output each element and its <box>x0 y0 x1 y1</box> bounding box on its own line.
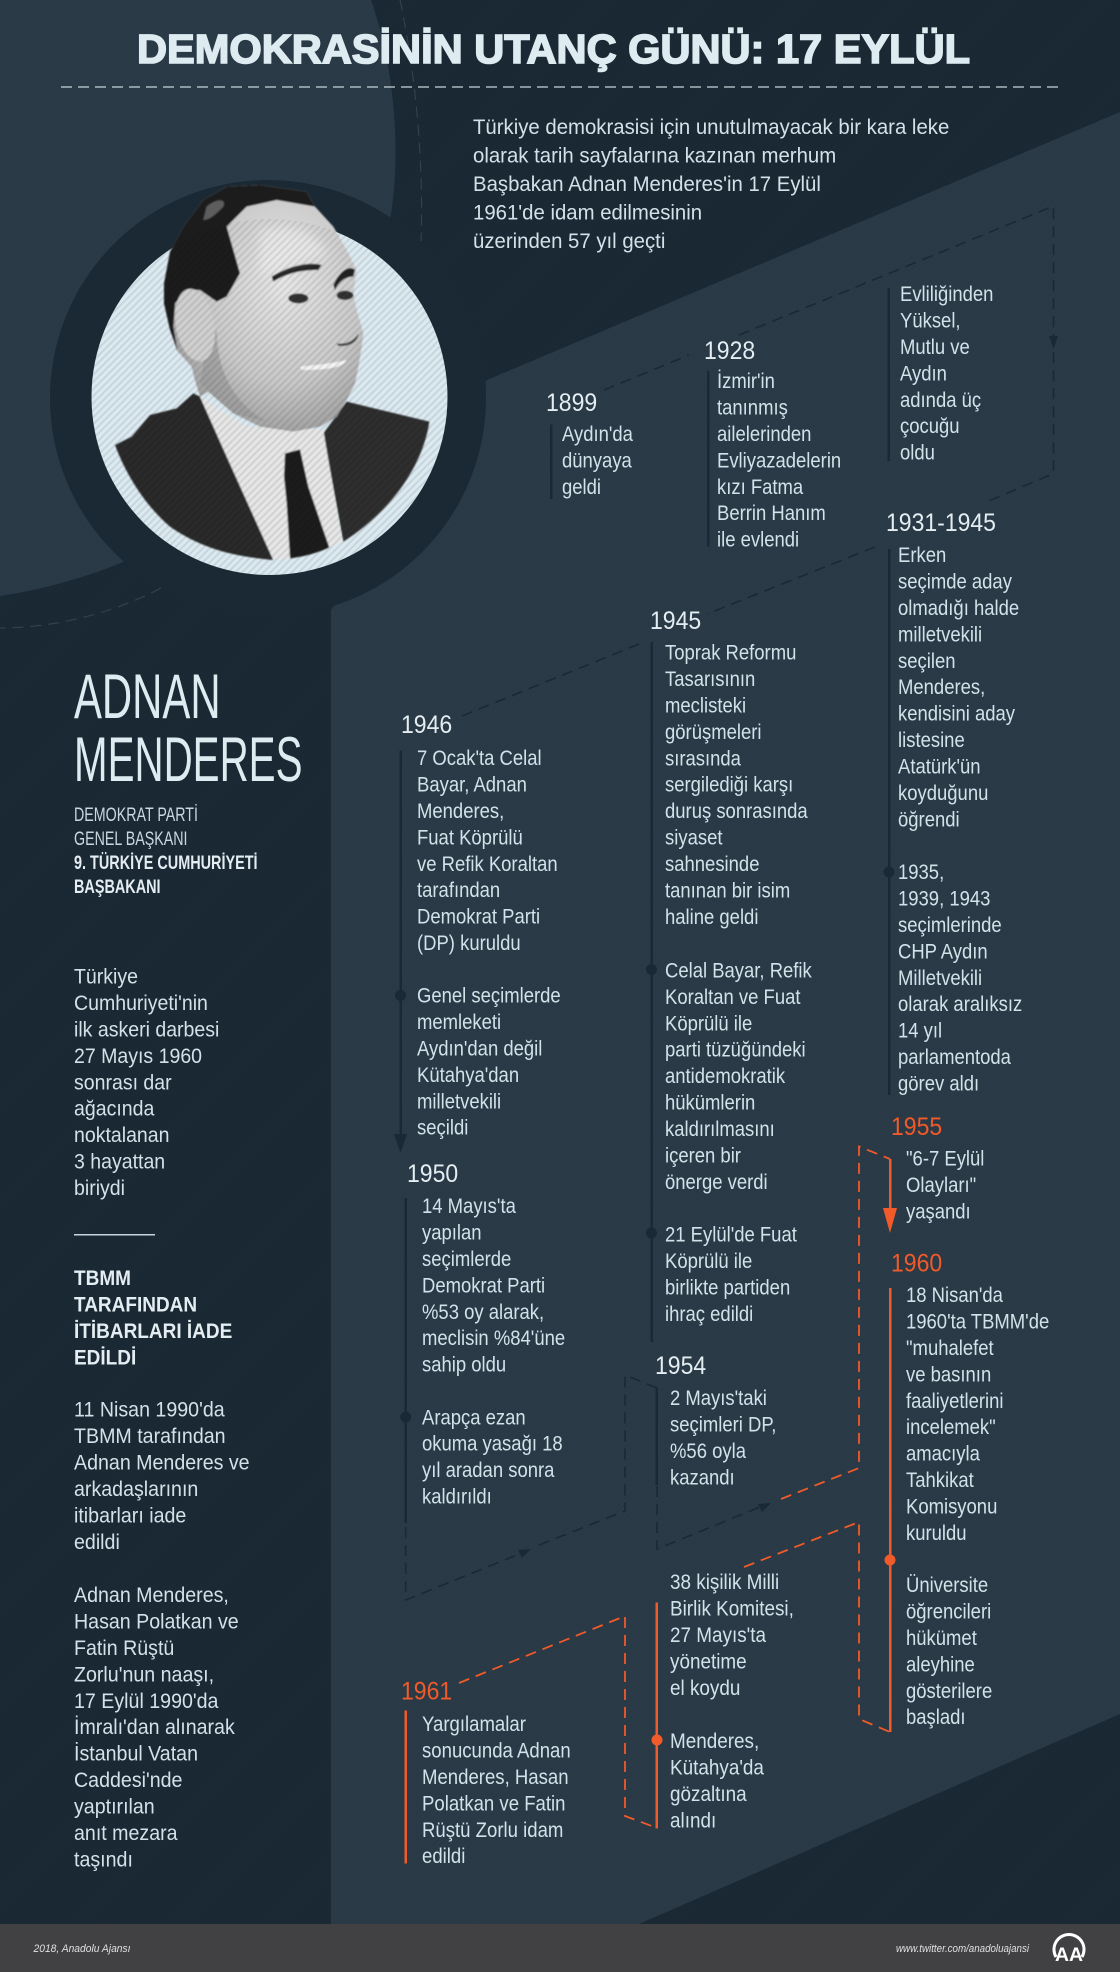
left text: coup note: 3 hayattan <box>74 1151 165 1174</box>
timeline: 1899: 1899 <box>546 389 597 417</box>
timeline: 1931-1945: görev aldı <box>898 1073 979 1096</box>
timeline: 1945: Toprak Reformu <box>665 641 796 665</box>
timeline: 1950: kaldırıldı <box>422 1486 492 1509</box>
timeline: 1961: Rüştü Zorlu idam <box>422 1819 563 1842</box>
timeline: 1945: önerge verdi <box>665 1171 768 1194</box>
timeline: 1960: aleyhine <box>906 1653 975 1677</box>
timeline: 1961: edildi <box>422 1845 465 1869</box>
timeline: 1945: 21 Eylül'de Fuat <box>665 1223 797 1247</box>
subtitle: party and office: GENEL BAŞKANI <box>74 828 187 850</box>
timeline: 1960: amacıyla <box>906 1443 980 1466</box>
portrait hatch overlay <box>92 219 448 575</box>
timeline: marriage children note: Evliliğinden <box>900 283 993 306</box>
timeline: 1950: seçimlerde <box>422 1248 511 1271</box>
timeline: 1945: Koraltan ve Fuat <box>665 986 801 1009</box>
timeline: 1950: meclisin %84'üne <box>422 1327 565 1351</box>
subtitle: party and office: 9. TÜRKİYE CUMHURİYETİ <box>74 852 258 874</box>
timeline: 1931-1945: koyduğunu <box>898 782 988 805</box>
timeline: 1945: Celal Bayar, Refik <box>665 959 812 983</box>
left text: reburial: Zorlu'nun naaşı, <box>74 1664 214 1687</box>
timeline: 1946: 1946 <box>401 711 452 739</box>
name heading <box>74 663 302 795</box>
background: top-left light shape <box>0 0 396 596</box>
timeline: 1931-1945: olmadığı halde <box>898 597 1019 620</box>
subtitle: party and office <box>74 804 258 898</box>
timeline: 1931-1945 <box>884 509 1022 1096</box>
left text: reburial: yaptırılan <box>74 1796 155 1819</box>
connector: 1950 to 1954 <box>406 1375 657 1600</box>
background: main light panel <box>331 112 1120 1924</box>
name heading: ADNAN <box>74 663 221 732</box>
timeline: 1945: görüşmeleri <box>665 721 761 744</box>
timeline: 1955 <box>883 1113 984 1233</box>
timeline: 1946: Kütahya'dan <box>417 1064 519 1087</box>
left text: rehabilitation: arkadaşlarının <box>74 1478 198 1501</box>
timeline: 1928 <box>704 337 841 552</box>
timeline: 1960 military coup: gözaltına <box>670 1783 748 1806</box>
timeline: 1945: birlikte partiden <box>665 1276 790 1300</box>
timeline: 1945: Tasarısının <box>665 668 755 691</box>
timeline: 1945: 1945 <box>650 607 701 635</box>
timeline: 1945: sergilediği karşı <box>665 774 793 797</box>
timeline: 1960: 1960'ta TBMM'de <box>906 1310 1049 1334</box>
intro text: 1961'de idam edilmesinin <box>473 201 702 225</box>
timeline: 1945: sahnesinde <box>665 853 759 876</box>
connector: 1954 to 1955 <box>657 1486 771 1549</box>
timeline: 1931-1945: Atatürk'ün <box>898 756 981 779</box>
timeline: 1960 military coup: Kütahya'da <box>670 1757 765 1780</box>
timeline: 1960 military coup: 38 kişilik Milli <box>670 1571 779 1594</box>
title underline dashed <box>61 86 1059 88</box>
timeline: 1960 military coup: Birlik Komitesi, <box>670 1598 794 1621</box>
connector: 1899 to 1928 <box>604 355 689 390</box>
timeline: 1950: okuma yasağı 18 <box>422 1433 563 1456</box>
timeline: 1931-1945: parlamentoda <box>898 1046 1011 1069</box>
timeline: 1945: Köprülü ile <box>665 1250 752 1273</box>
left text: rehabilitation: Adnan Menderes ve <box>74 1452 250 1475</box>
timeline: 1950 <box>400 1160 565 1523</box>
timeline: 1928: Evliyazadelerin <box>717 449 841 473</box>
timeline: 1960 military coup: 27 Mayıs'ta <box>670 1624 767 1647</box>
timeline: 1946: 7 Ocak'ta Celal <box>417 747 542 770</box>
timeline: 1960: Üniversite <box>906 1574 988 1597</box>
timeline: 1961: 1961 <box>401 1678 452 1706</box>
connector: 1931 to 1945 <box>707 547 875 614</box>
decorative faint dashes <box>0 0 422 628</box>
timeline: 1931-1945: 1931-1945 <box>886 509 996 537</box>
left heading: TBMM: İTİBARLARI İADE <box>74 1319 232 1343</box>
timeline: 1946: Fuat Köprülü <box>417 826 523 850</box>
intro text: Başbakan Adnan Menderes'in 17 Eylül <box>473 173 821 196</box>
timeline: 1954 <box>655 1352 776 1490</box>
timeline: 1960: incelemek" <box>906 1416 996 1440</box>
timeline: 1961: sonucunda Adnan <box>422 1739 571 1763</box>
timeline: 1955: Olayları" <box>906 1174 976 1197</box>
orange connector: coup to 1961 <box>459 1616 657 1828</box>
left text: coup note: Türkiye <box>74 966 138 989</box>
timeline: 1945: kaldırılmasını <box>665 1118 775 1141</box>
left text: reburial: Caddesi'nde <box>74 1770 182 1792</box>
left text: coup note: 27 Mayıs 1960 <box>74 1045 202 1068</box>
timeline: 1928: ile evlendi <box>717 529 799 552</box>
timeline: 1960: hükümet <box>906 1627 977 1650</box>
timeline: 1928: Berrin Hanım <box>717 502 826 526</box>
timeline: 1931-1945: CHP Aydın <box>898 940 988 964</box>
timeline: 1960: öğrencileri <box>906 1600 991 1624</box>
timeline: 1960: Komisyonu <box>906 1496 997 1519</box>
timeline: 1931-1945: seçimde aday <box>898 570 1012 594</box>
timeline: 1960: faaliyetlerini <box>906 1390 1004 1413</box>
timeline: 1950: %53 oy alarak, <box>422 1301 544 1324</box>
timeline: 1928: tanınmış <box>717 396 788 420</box>
connector: 1928 to marriage note and down to 1931 <box>739 206 1058 503</box>
icon: AA logo <box>1054 1935 1084 1966</box>
timeline: 1931-1945: seçilen <box>898 650 955 673</box>
left text: reburial: Hasan Polatkan ve <box>74 1611 239 1634</box>
timeline: 1950: sahip oldu <box>422 1354 506 1377</box>
intro text: Türkiye demokrasisi için unutulmayacak bir kara leke <box>473 116 949 139</box>
timeline: 1931-1945: listesine <box>898 729 965 752</box>
left divider <box>74 1234 155 1236</box>
left text: rehabilitation: itibarları iade <box>74 1505 186 1528</box>
timeline: 1954: 1954 <box>655 1352 706 1380</box>
timeline: 1945 <box>646 607 812 1342</box>
timeline: 1946: Demokrat Parti <box>417 906 540 929</box>
timeline: 1931-1945: Milletvekili <box>898 967 982 990</box>
timeline: 1960: başladı <box>906 1706 966 1730</box>
left text: reburial: anıt mezara <box>74 1822 178 1845</box>
timeline: 1945: antidemokratik <box>665 1065 785 1089</box>
timeline: 1960 military coup <box>652 1571 794 1833</box>
timeline: 1931-1945: Erken <box>898 544 946 567</box>
timeline: 1950: Demokrat Parti <box>422 1274 545 1298</box>
timeline: 1946: tarafından <box>417 879 500 903</box>
timeline: 1931-1945: 14 yıl <box>898 1020 942 1043</box>
left text: reburial: İstanbul Vatan <box>74 1742 198 1766</box>
timeline: 1960: 1960 <box>891 1250 942 1278</box>
timeline: marriage children note: Aydın <box>900 362 947 386</box>
timeline: 1960: kuruldu <box>906 1522 967 1545</box>
left text: rehabilitation: TBMM tarafından <box>74 1425 226 1448</box>
timeline: 1931-1945: öğrendi <box>898 808 960 832</box>
arrow: toward 1954 <box>518 1549 531 1558</box>
timeline: 1945: hükümlerin <box>665 1092 755 1115</box>
timeline: 1931-1945: olarak aralıksız <box>898 993 1022 1017</box>
portrait: Adnan Menderes photo <box>115 185 429 560</box>
left text: reburial: taşındı <box>74 1849 133 1872</box>
timeline: marriage children note <box>888 283 993 465</box>
title: DEMOKRASİNİN UTANÇ GÜNÜ: 17 EYLÜL <box>137 26 970 72</box>
timeline: marriage children note: Yüksel, <box>900 309 961 333</box>
timeline: 1960 military coup: alındı <box>670 1809 716 1833</box>
connector: 1945 to 1946 <box>457 644 639 718</box>
footer credit: 2018, Anadolu Ajansı <box>33 1943 130 1955</box>
timeline: 1960: 18 Nisan'da <box>906 1284 1003 1307</box>
timeline: 1960 <box>884 1250 1049 1732</box>
timeline: 1946: Menderes, <box>417 800 504 823</box>
left text: coup note: biriydi <box>74 1177 125 1200</box>
timeline: 1960 military coup: el koydu <box>670 1677 740 1700</box>
intro text: olarak tarih sayfalarına kazınan merhum <box>473 144 836 168</box>
timeline: 1931-1945: 1935, <box>898 861 944 884</box>
timeline: 1946: Genel seçimlerde <box>417 984 561 1008</box>
timeline: marriage children note: Mutlu ve <box>900 336 970 359</box>
timeline: 1945: içeren bir <box>665 1145 741 1168</box>
timeline: 1928: 1928 <box>704 337 755 365</box>
left text: rehabilitation: edildi <box>74 1531 120 1554</box>
timeline: 1946: ve Refik Koraltan <box>417 853 558 876</box>
intro text: üzerinden 57 yıl geçti <box>473 230 665 253</box>
timeline: 1931-1945: Menderes, <box>898 676 985 700</box>
timeline: 1945: ihraç edildi <box>665 1303 753 1326</box>
footer bar <box>0 1924 1120 1972</box>
timeline: 1928: kızı Fatma <box>717 476 803 499</box>
timeline: 1954: seçimleri DP, <box>670 1413 776 1437</box>
left heading: TBMM: TBMM <box>74 1267 131 1290</box>
timeline: 1931-1945: 1939, 1943 <box>898 887 990 911</box>
portrait: dark ring <box>50 180 486 616</box>
icon: AA logo: AA <box>1055 1945 1083 1966</box>
timeline: 1960: ve basının <box>906 1363 991 1387</box>
timeline: 1961 <box>401 1678 571 1869</box>
timeline: 1931-1945: milletvekili <box>898 623 982 647</box>
timeline: 1899: dünyaya <box>562 449 632 473</box>
subtitle: party and office: DEMOKRAT PARTİ <box>74 804 198 826</box>
timeline: 1960 military coup: Menderes, <box>670 1730 759 1753</box>
orange connector: into 1955 <box>781 1146 890 1499</box>
left heading: TBMM: TARAFINDAN <box>74 1294 197 1317</box>
timeline: 1945: tanınan bir isim <box>665 880 790 903</box>
timeline: 1931-1945: kendisini aday <box>898 703 1015 726</box>
name heading: MENDERES <box>74 725 302 795</box>
timeline: 1931-1945: seçimlerinde <box>898 914 1002 937</box>
timeline: 1946: seçildi <box>417 1117 468 1140</box>
footer twitter link: www.twitter.com/anadoluajansi <box>896 1943 1029 1955</box>
timeline: 1954: %56 oyla <box>670 1440 746 1463</box>
timeline: 1955: 1955 <box>891 1113 942 1141</box>
timeline: 1946: milletvekili <box>417 1090 501 1114</box>
timeline: 1945: Köprülü ile <box>665 1012 752 1036</box>
arrow: toward 1955 <box>758 1503 771 1512</box>
arrow: down right side <box>1049 336 1058 349</box>
timeline: 1946 <box>394 711 561 1153</box>
portrait: pale disc <box>92 219 448 575</box>
timeline: marriage children note: oldu <box>900 442 935 465</box>
timeline: 1950: Arapça ezan <box>422 1406 526 1430</box>
left heading: TBMM: EDİLDİ <box>74 1345 136 1370</box>
timeline: 1950: 1950 <box>407 1160 458 1188</box>
left text: reburial: Adnan Menderes, <box>74 1584 229 1607</box>
timeline: marriage children note: adında üç <box>900 389 981 412</box>
left text: reburial: İmralı'dan alınarak <box>74 1716 236 1739</box>
timeline: 1960: "muhalefet <box>906 1337 994 1360</box>
timeline: 1946: Bayar, Adnan <box>417 773 527 797</box>
timeline: 1961: Polatkan ve Fatin <box>422 1792 565 1816</box>
timeline: 1960: gösterilere <box>906 1680 992 1703</box>
timeline: 1945: haline geldi <box>665 906 758 929</box>
orange connector: 1960 to military coup <box>744 1522 890 1732</box>
timeline: 1950: yapılan <box>422 1221 482 1245</box>
timeline: 1961: Yargılamalar <box>422 1713 526 1736</box>
timeline: 1960: Tahkikat <box>906 1469 974 1492</box>
left text: coup note: Cumhuriyeti'nin <box>74 992 208 1015</box>
left text: coup note: ağacında <box>74 1098 155 1121</box>
left text: coup note: ilk askeri darbesi <box>74 1019 219 1042</box>
subtitle: party and office: BAŞBAKANI <box>74 876 161 898</box>
left text: reburial: 17 Eylül 1990'da <box>74 1690 219 1713</box>
timeline: 1945: sırasında <box>665 747 741 771</box>
timeline: 1950: 14 Mayıs'ta <box>422 1195 516 1218</box>
timeline: 1946: (DP) kuruldu <box>417 932 521 955</box>
timeline: 1928: ailelerinden <box>717 423 811 446</box>
timeline: 1899: Aydın'da <box>562 423 633 446</box>
timeline: 1945: duruş sonrasında <box>665 800 808 824</box>
timeline: 1960 military coup: yönetime <box>670 1650 747 1674</box>
timeline: 1945: parti tüzüğündeki <box>665 1039 806 1062</box>
timeline: 1950: yıl aradan sonra <box>422 1459 554 1483</box>
left text: coup note: sonrası dar <box>74 1072 172 1094</box>
timeline: 1946: Aydın'dan değil <box>417 1037 542 1061</box>
timeline: marriage children note: çocuğu <box>900 415 960 439</box>
timeline: 1945: meclisteki <box>665 694 746 718</box>
timeline: 1955: yaşandı <box>906 1200 971 1224</box>
timeline: 1946: memleketi <box>417 1011 501 1034</box>
timeline: 1899: geldi <box>562 476 601 499</box>
timeline: 1954: 2 Mayıs'taki <box>670 1387 767 1410</box>
left text: reburial: Fatin Rüştü <box>74 1637 174 1660</box>
left text: coup note: noktalanan <box>74 1125 170 1147</box>
timeline: 1954: kazandı <box>670 1466 735 1490</box>
timeline: 1955: "6-7 Eylül <box>906 1148 984 1171</box>
timeline: 1961: Menderes, Hasan <box>422 1766 569 1789</box>
timeline: 1899 <box>546 389 633 499</box>
timeline: 1945: siyaset <box>665 827 723 850</box>
timeline: 1928: İzmir'in <box>717 369 775 393</box>
left text: rehabilitation: 11 Nisan 1990'da <box>74 1399 225 1422</box>
